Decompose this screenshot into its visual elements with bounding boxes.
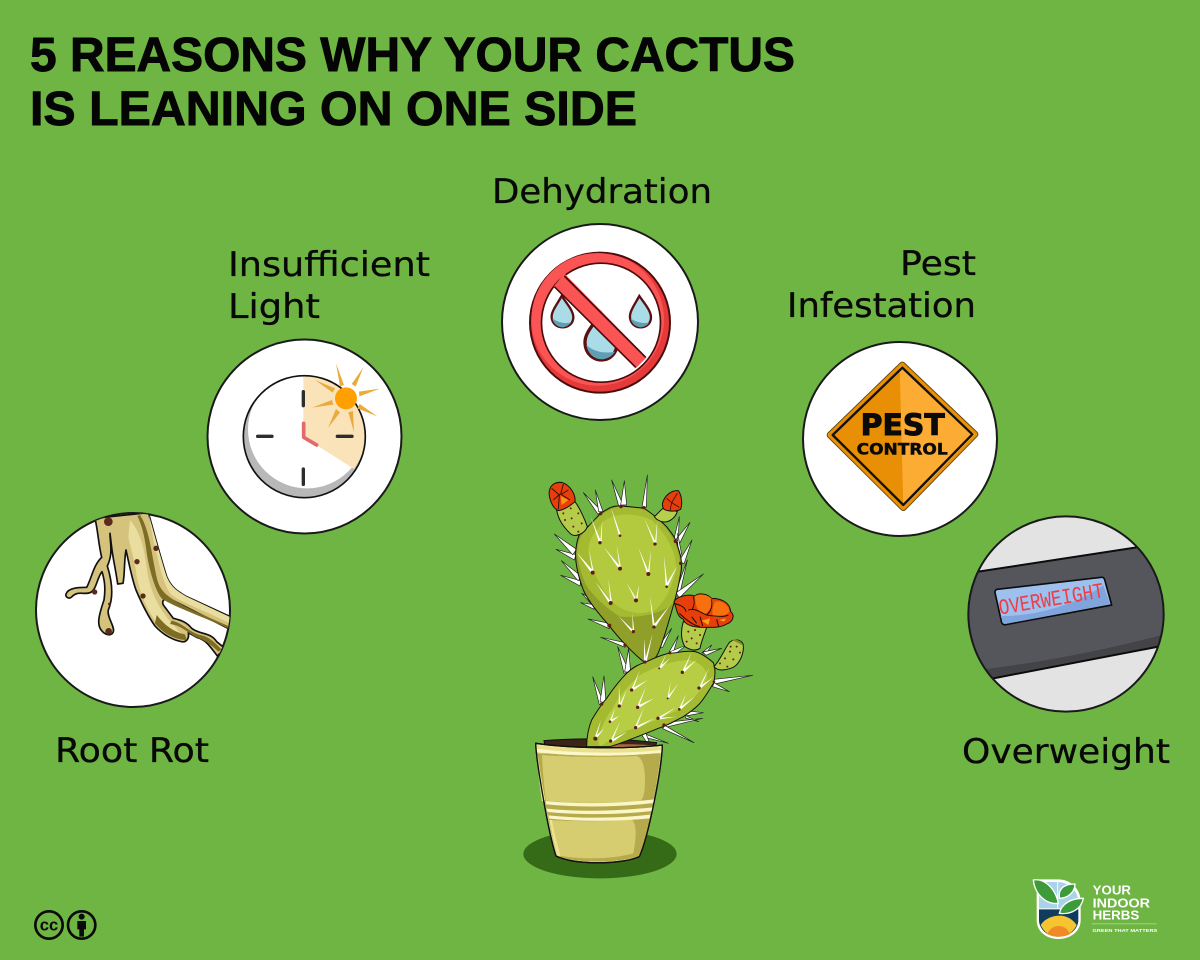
icon: creative commons attribution: cc [40,916,58,935]
label: Insufficient Light [228,245,430,327]
icon: scale display: OVERWEIGHT [997,579,1106,622]
logo wordmark: YOUR [1093,883,1131,898]
right bud [654,491,682,522]
icon: clock with sun [243,363,380,498]
title: 5 REASONS WHY YOUR CACTUS [30,29,795,82]
cactus pads [576,506,715,747]
icon: pest control sign: PEST [861,408,945,442]
cactus areoles [591,505,715,743]
logo wordmark [1092,883,1157,933]
logo wordmark: INDOOR [1093,895,1150,910]
label: Root Rot: Root Rot [55,731,209,771]
icon: pest control sign: CONTROL [857,439,948,458]
flower stem [682,622,707,650]
outer spines [554,475,753,753]
label: Insufficient Light: Insufficient [228,245,430,285]
panel: pest infestation icon [803,342,997,536]
logo emblem [1033,879,1083,939]
small pad right [714,640,743,670]
title [30,29,795,136]
left bud [549,482,587,535]
icon: creative commons attribution [35,911,95,939]
label: Pest Infestation [787,244,976,326]
pot shadow [523,830,677,878]
logo: Your Indoor Herbs [1033,879,1157,939]
icon: rotting roots [66,513,232,656]
pot [536,739,662,863]
icon: scale display [960,516,1173,712]
label: Dehydration: Dehydration [492,172,712,212]
label: Pest Infestation: Infestation [787,286,976,326]
logo wordmark: GREEN THAT MATTERS [1092,928,1157,933]
panel: insufficient light icon [208,340,402,534]
inner spines [576,507,714,742]
illustration: potted cactus [523,475,753,878]
label: Pest Infestation: Pest [900,244,976,284]
label: Insufficient Light: Light [228,287,320,327]
logo wordmark: HERBS [1093,908,1139,923]
title: IS LEANING ON ONE SIDE [30,83,637,136]
icon: no water drops sign [529,252,671,394]
panel: dehydration icon [502,224,698,420]
panel: root rot icon [36,513,232,707]
flower [674,594,733,627]
panel: overweight icon [960,516,1173,712]
label: Overweight: Overweight [962,732,1170,772]
icon: pest control sign [830,365,975,508]
